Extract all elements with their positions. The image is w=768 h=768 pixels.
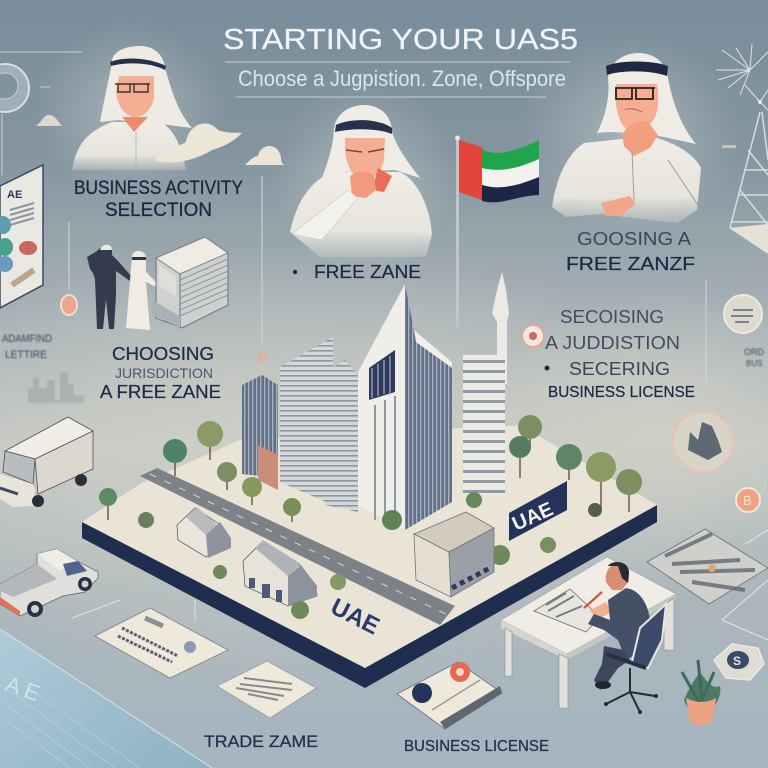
icon: magnifier lens top-left (0, 52, 82, 175)
trees (99, 415, 642, 619)
badge: S (714, 644, 764, 680)
city platform (82, 425, 657, 688)
sign: UAE: UAE (509, 498, 557, 536)
road (140, 468, 455, 625)
truck: pickup (0, 549, 98, 617)
icon: coin right (706, 280, 762, 385)
person: choosing a free zone (552, 53, 701, 223)
trade card (95, 608, 228, 678)
clouds (36, 115, 284, 165)
person: thinking about free zone (290, 105, 432, 257)
desk (501, 557, 676, 708)
label: securing jurisdiction and business license (522, 307, 695, 401)
fireworks and radio tower (716, 44, 768, 254)
subtitle with rules (225, 62, 570, 97)
businessman writing (534, 562, 650, 690)
label: securing jurisdiction and business license: BUSINESS LICENSE (548, 384, 695, 401)
label: left faded text: LETTIRE (5, 349, 47, 361)
billboard: UAE plan (0, 165, 43, 308)
label: left faded text: ADAMFIND (2, 333, 52, 345)
label: free zane: FREE ZANE (314, 262, 421, 282)
emblem: skyline medallion (673, 412, 733, 472)
license booklet (397, 662, 502, 729)
water band with faded UAE lettering: AE (2, 671, 48, 708)
label: left faded text (2, 333, 52, 361)
label: choosing a free zone (566, 229, 695, 274)
subtitle with rules: Choose a Jugpistion. Zone, Offspore (238, 66, 566, 91)
label: securing jurisdiction and business license: SECOISING (560, 307, 664, 327)
label: choosing a free zone: FREE ZANZF (566, 254, 695, 274)
label: business license: BUSINESS LICENSE (404, 738, 549, 755)
label: choosing jurisdiction: A FREE ZANE (100, 382, 221, 402)
label: securing jurisdiction and business license: SECERING (569, 359, 670, 379)
people at filing cabinet (87, 245, 158, 330)
label: securing jurisdiction and business license: A JUDDISTION (545, 333, 680, 353)
distant skyline (28, 372, 84, 403)
icon: small coin left (61, 176, 267, 363)
office chair (604, 604, 666, 714)
newspaper (647, 529, 768, 604)
title: STARTING YOUR UAS5 (223, 24, 578, 56)
potted plant (682, 660, 720, 725)
low office block (414, 512, 494, 597)
flag of UAE (455, 136, 539, 328)
label: choosing a free zone: GOOSING A (577, 229, 691, 249)
label: business activity selection (74, 178, 243, 221)
truck: box lorry (0, 417, 93, 507)
label: right faded text (744, 347, 764, 368)
label: choosing jurisdiction: CHOOSING (112, 344, 214, 364)
low-rise houses (177, 507, 317, 606)
ground lettering: UAE: UAE (326, 593, 384, 640)
label: choosing jurisdiction: JURISDICTION (115, 365, 213, 381)
label: business activity selection: SELECTION (105, 200, 212, 221)
label: right faded text: ORD (744, 347, 764, 357)
badge: S: S (733, 654, 741, 668)
person: business activity advisor (72, 46, 192, 170)
contract document (217, 661, 316, 718)
skyline: towers (242, 272, 509, 530)
sign: UAE (509, 481, 567, 541)
label: right faded text: BUS (746, 359, 762, 368)
label: trade zame: TRADE ZAME (204, 732, 318, 751)
label: choosing jurisdiction (100, 344, 221, 402)
billboard: UAE plan: AE (7, 189, 22, 201)
connector lines (72, 530, 768, 640)
icon: coin B: B (743, 493, 752, 508)
document stack and cabinet (152, 237, 228, 328)
label: business activity selection: BUSINESS ACTIVITY (74, 178, 243, 199)
icon: coin B (736, 445, 766, 512)
water band with faded UAE lettering (0, 629, 212, 768)
